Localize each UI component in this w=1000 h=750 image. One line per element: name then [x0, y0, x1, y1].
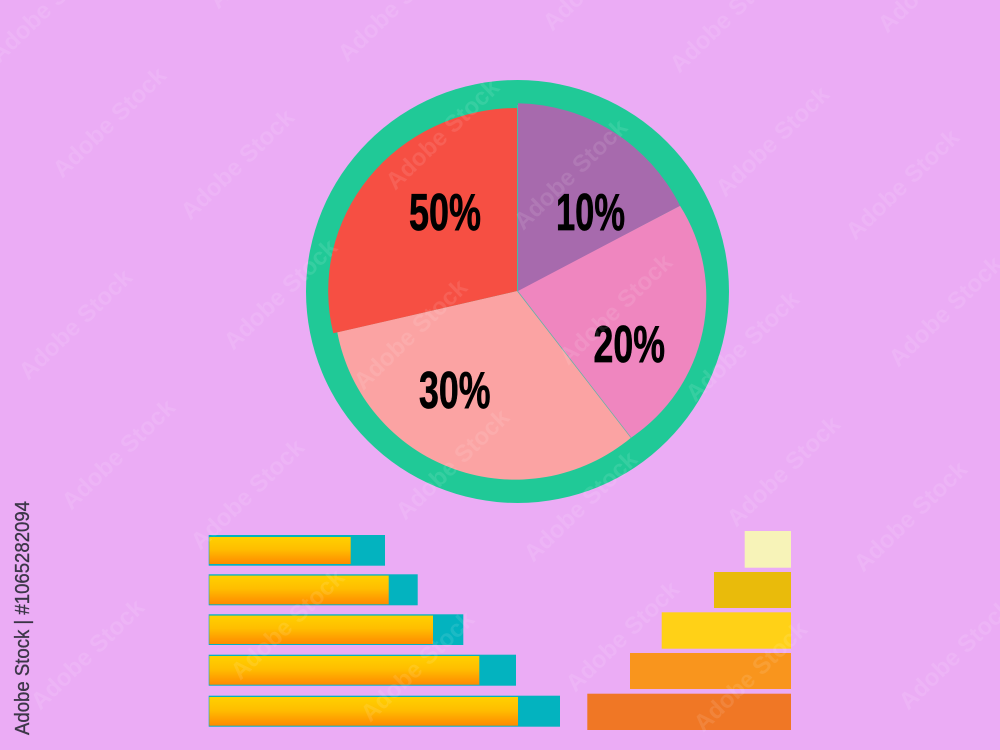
- stock watermarks: Adobe Stock: [711, 80, 835, 202]
- stock watermarks: Adobe Stock: [57, 393, 181, 515]
- stock watermarks: Adobe Stock: [48, 61, 172, 183]
- step 3 yellow: [662, 612, 791, 649]
- stock watermarks: Adobe Stock: [226, 563, 350, 685]
- stock watermarks: Adobe Stock: [519, 445, 643, 567]
- stock watermarks: Adobe Stock: [176, 103, 300, 225]
- pie chart: [306, 80, 729, 503]
- stock watermarks: Adobe Stock: [391, 403, 515, 525]
- bar 5: [209, 696, 560, 727]
- slice divider lines: [518, 105, 631, 438]
- step 2 dark yellow: [714, 572, 791, 608]
- slice: 50% red: [328, 108, 517, 333]
- label: 20%: 20%: [594, 316, 665, 374]
- staircase bars: [587, 531, 791, 730]
- stock watermarks: Adobe Stock: [356, 605, 480, 727]
- stock watermarks: Adobe Stock: [219, 233, 343, 355]
- label: 10%: 10%: [556, 184, 625, 242]
- step 4 orange: [630, 653, 791, 689]
- stock watermarks: Adobe Stock: [841, 123, 965, 245]
- horizontal progress bars: [209, 535, 560, 727]
- stock watermarks: Adobe Stock: [26, 593, 150, 715]
- stock watermarks: Adobe Stock: [561, 575, 685, 697]
- stock watermarks: Adobe Stock: [186, 433, 310, 555]
- stock watermarks: Adobe Stock: [509, 113, 633, 235]
- vertical stock id text: Adobe Stock | #1065282094: [12, 501, 34, 735]
- bar 4: [209, 655, 516, 686]
- stock watermarks: Adobe Stock: [349, 273, 473, 395]
- stock watermarks: Adobe Stock: [681, 285, 805, 407]
- stock watermarks: Adobe Stock: [381, 73, 505, 195]
- stock watermarks: Adobe Stock: [554, 248, 678, 370]
- bar 3: [209, 614, 463, 645]
- stock watermarks: Adobe Stock: [849, 455, 973, 577]
- slice: 30% peach: [337, 291, 631, 480]
- green ring: [306, 80, 729, 503]
- step 5 dark orange: [587, 694, 791, 730]
- stock watermarks: Adobe Stock: [722, 410, 846, 532]
- label: 50%: 50%: [409, 184, 481, 242]
- slice: 10% purple: [518, 103, 680, 291]
- stock watermarks: Adobe Stock: [14, 263, 138, 385]
- stock watermarks: Adobe Stock: [689, 615, 813, 737]
- label: 30%: 30%: [419, 362, 490, 420]
- bar 1: [209, 535, 385, 566]
- slice: 20% pink: [517, 206, 706, 438]
- bar 2: [209, 574, 418, 605]
- step 1 cream: [745, 531, 791, 568]
